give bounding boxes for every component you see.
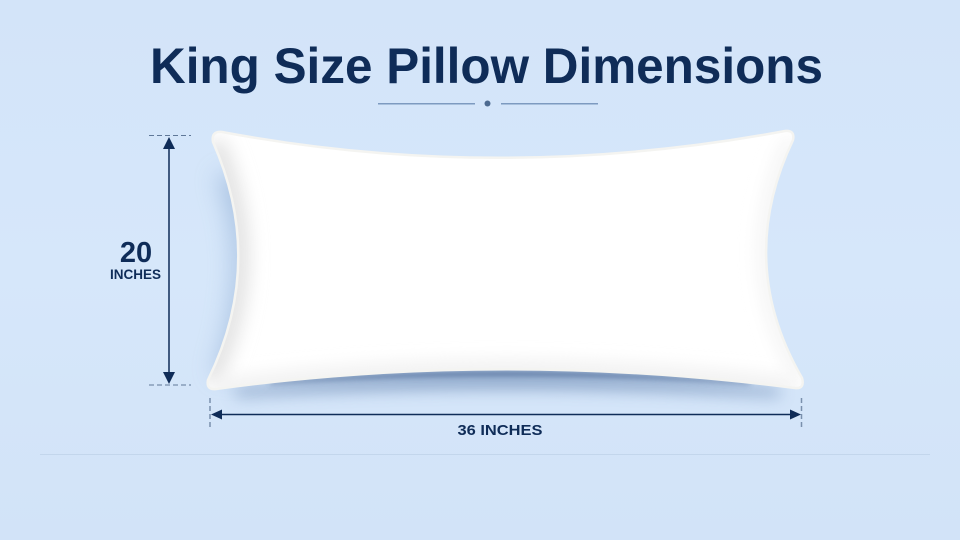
title divider: [378, 100, 598, 106]
height value: 20: [120, 237, 152, 269]
width label: 36 INCHES: [458, 422, 542, 439]
height unit: INCHES: [110, 267, 161, 282]
pillow piping: [208, 131, 803, 389]
pillow: [208, 131, 803, 389]
height dimension: [110, 136, 191, 385]
title: King Size Pillow Dimensions: [150, 38, 823, 94]
pillow soft shading: [208, 140, 802, 389]
width dimension: [210, 398, 802, 439]
pillow shadow: [214, 175, 780, 396]
floor line: [40, 454, 930, 455]
